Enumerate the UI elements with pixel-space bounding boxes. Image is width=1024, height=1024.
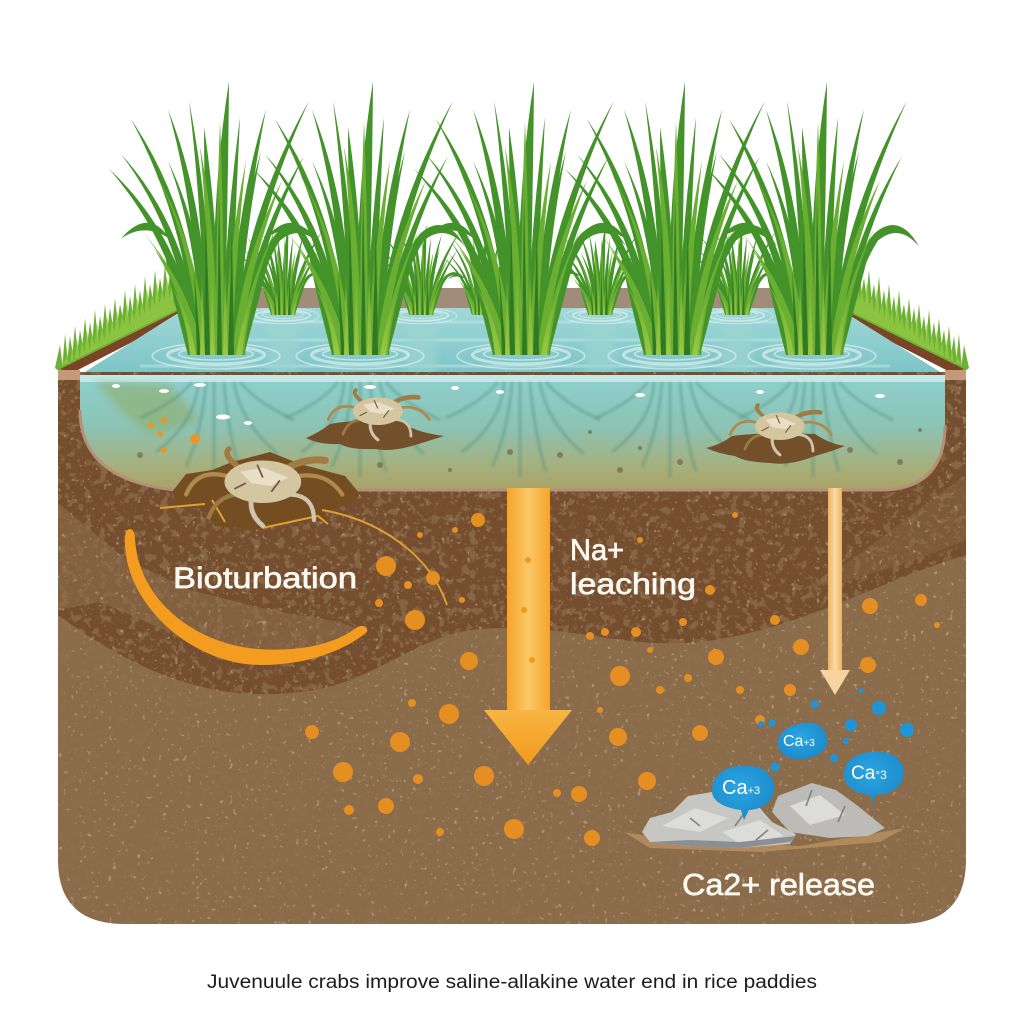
rice plant 5 (707, 81, 919, 355)
label: Ca2+ release: Ca2+ release (682, 867, 875, 902)
rice plant 4 (565, 81, 777, 355)
dark soil layer (58, 372, 966, 694)
Ca bubble left: Ca+3 (722, 777, 760, 799)
plant reflections (140, 382, 893, 477)
right grass bank (837, 264, 969, 373)
rice plant 3 (414, 81, 626, 355)
floating sediment (137, 428, 922, 473)
leached ion dots (305, 512, 940, 846)
caption: Juvenuule crabs improve saline-allakine water end in rice paddies (207, 972, 817, 993)
water cross-section (80, 375, 945, 490)
far paddy bank (186, 288, 838, 312)
label: Na+ leaching (570, 534, 696, 601)
Na+ leaching arrow (484, 488, 572, 765)
thin leaching arrow (820, 488, 850, 695)
Ca bubble left (712, 766, 774, 820)
green reflection patch (95, 382, 200, 435)
rear tufts with ripples (238, 225, 781, 324)
rice plant 1 (109, 81, 321, 355)
water ripples around front tufts (152, 343, 876, 369)
water surface (80, 308, 945, 375)
calcium ion droplets (758, 688, 914, 772)
lighter soil wedge (58, 503, 365, 652)
crab in water, centre (306, 390, 444, 450)
orange flecks in water (148, 417, 200, 453)
left grass bank (55, 264, 187, 373)
soil cross-section (58, 372, 966, 924)
Ca bubble right: Ca°3 (851, 763, 887, 784)
crab in water, right (706, 405, 845, 464)
burrow trail (322, 510, 447, 605)
rice plant 2 (253, 81, 465, 355)
limestone rocks (624, 783, 905, 852)
Ca bubble right (844, 752, 904, 804)
bioturbation swoosh (125, 529, 367, 665)
label: Na+ leaching: Na+ (570, 534, 624, 567)
label: Na+ leaching: leaching (570, 568, 696, 601)
surface glints (112, 383, 885, 425)
Ca bubble top (778, 723, 827, 759)
label: Bioturbation: Bioturbation (173, 562, 357, 595)
soil top rim (58, 370, 966, 380)
large burrowing crab (160, 449, 360, 530)
Ca bubble top: Ca+3 (783, 733, 815, 750)
